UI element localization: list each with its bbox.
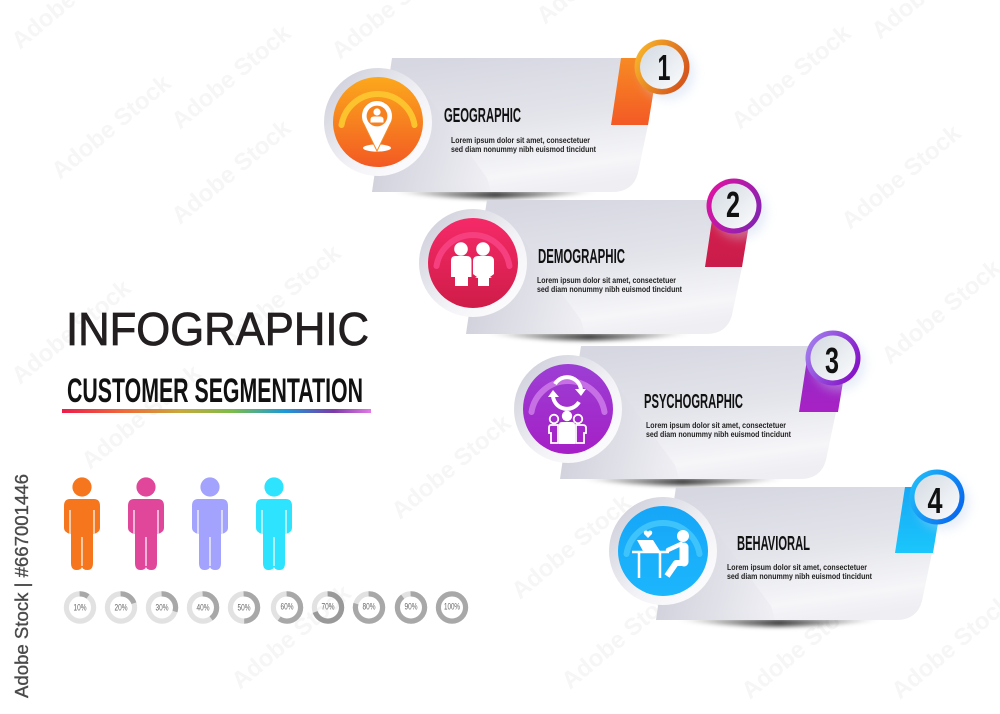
- card shadow: [674, 619, 884, 626]
- icon disc: [514, 355, 622, 463]
- heading: GEOGRAPHIC: [444, 104, 521, 127]
- ribbon: [895, 487, 944, 553]
- ring 100%: [438, 594, 466, 621]
- ring 60%: [273, 594, 301, 621]
- stock id vertical label: Adobe Stock | #667001446: [12, 474, 32, 698]
- body text: sed diam nonummy nibh euismod tincidunt: [451, 145, 596, 154]
- card shadow: [484, 333, 694, 340]
- ribbon: [799, 346, 849, 412]
- icon disc: [324, 68, 432, 176]
- ring 10%: 10%: [74, 603, 86, 613]
- body text: Lorem ipsum dolor sit amet, consectetuer: [646, 421, 787, 430]
- body text: [451, 136, 596, 154]
- body text: sed diam nonummy nibh euismod tincidunt: [646, 430, 791, 439]
- ring 40%: [189, 594, 217, 621]
- stock watermarks: Adobe Stock: [167, 19, 297, 135]
- person icons: [64, 477, 292, 570]
- number badge 2: [706, 178, 767, 239]
- card body: [372, 58, 659, 192]
- icon: person at desk: [632, 530, 689, 578]
- panel: psychographic: [514, 330, 866, 486]
- stock watermarks: Adobe Stock: [47, 69, 177, 185]
- card shadow: [578, 478, 788, 486]
- ring 70%: [314, 594, 342, 621]
- ring 80%: 80%: [362, 602, 376, 612]
- number badge 1: [634, 40, 695, 100]
- ring 10%: [66, 594, 94, 621]
- panel: geographic: [324, 40, 695, 198]
- circle shadow wedge: [656, 521, 775, 620]
- ring 40%: 40%: [196, 603, 210, 613]
- number badge 1: 1: [658, 47, 670, 88]
- percentage rings: [66, 594, 466, 621]
- circle shadow wedge: [372, 92, 491, 192]
- icon disc: [419, 209, 527, 317]
- card body: [656, 487, 943, 620]
- icon: lavender person: [192, 477, 228, 570]
- body text: [727, 563, 872, 581]
- number badge 4: [910, 470, 970, 530]
- icon: people with cycle arrows: [548, 377, 586, 444]
- icon: cyan person: [256, 477, 292, 570]
- number badge 2: 2: [726, 184, 740, 225]
- card body: [466, 200, 753, 334]
- body text: sed diam nonummy nibh euismod tincidunt: [727, 572, 872, 581]
- ring 50%: 50%: [238, 603, 250, 613]
- heading: PSYCHOGRAPHIC: [644, 390, 743, 413]
- body text: [537, 276, 682, 294]
- panel: demographic: [419, 178, 767, 340]
- icon: location pin with person: [361, 100, 392, 152]
- body text: sed diam nonummy nibh euismod tincidunt: [537, 285, 682, 294]
- stock watermarks: Adobe Stock: [727, 19, 857, 135]
- ring 90%: [397, 594, 425, 621]
- title: INFOGRAPHIC: [66, 303, 369, 355]
- ring 100%: 100%: [444, 602, 460, 612]
- number badge 3: 3: [825, 340, 839, 381]
- ring 60%: 60%: [280, 602, 294, 612]
- ring 20%: [107, 594, 135, 621]
- stock watermarks: Adobe Stock: [557, 579, 687, 695]
- stock watermarks: Adobe Stock: [217, 239, 347, 355]
- body text: Lorem ipsum dolor sit amet, consectetuer: [727, 563, 868, 572]
- icon: orange person: [64, 477, 100, 570]
- body text: Lorem ipsum dolor sit amet, consectetuer: [451, 136, 591, 145]
- rainbow underline: [62, 409, 371, 413]
- number badge 3: [806, 330, 866, 391]
- stock watermarks: Adobe Stock: [7, 274, 137, 390]
- stock watermarks: Adobe Stock: [387, 409, 517, 525]
- stock watermarks: Adobe Stock: [837, 119, 967, 235]
- stock watermarks: Adobe Stock: [227, 579, 357, 695]
- ring 90%: 90%: [404, 602, 418, 612]
- body text: [646, 421, 791, 439]
- card body: [560, 346, 847, 479]
- stock watermarks: Adobe Stock: [167, 114, 297, 230]
- card shadow: [390, 191, 600, 198]
- stock watermarks: Adobe Stock: [507, 489, 637, 605]
- ring 70%: 70%: [322, 602, 334, 612]
- ribbon: [705, 200, 753, 267]
- body text: Lorem ipsum dolor sit amet, consectetuer: [537, 276, 677, 285]
- circle shadow wedge: [466, 234, 585, 334]
- stock watermarks: Adobe Stock: [77, 359, 207, 475]
- icon disc: [609, 497, 717, 605]
- icon: two people: [451, 242, 494, 286]
- ring 30%: 30%: [156, 603, 168, 613]
- heading: DEMOGRAPHIC: [538, 245, 625, 268]
- stock watermarks: Adobe Stock: [737, 589, 867, 705]
- ring 30%: [148, 594, 176, 621]
- ring 50%: [230, 594, 258, 621]
- ring 80%: [355, 594, 383, 621]
- heading: BEHAVIORAL: [737, 532, 810, 555]
- ribbon: [611, 58, 659, 125]
- number badge 4: 4: [928, 480, 942, 521]
- ring 20%: 20%: [114, 603, 128, 613]
- subtitle: CUSTOMER SEGMENTATION: [67, 372, 363, 410]
- circle shadow wedge: [560, 380, 679, 479]
- icon: pink person: [128, 477, 164, 570]
- panel: behavioral: [609, 470, 970, 626]
